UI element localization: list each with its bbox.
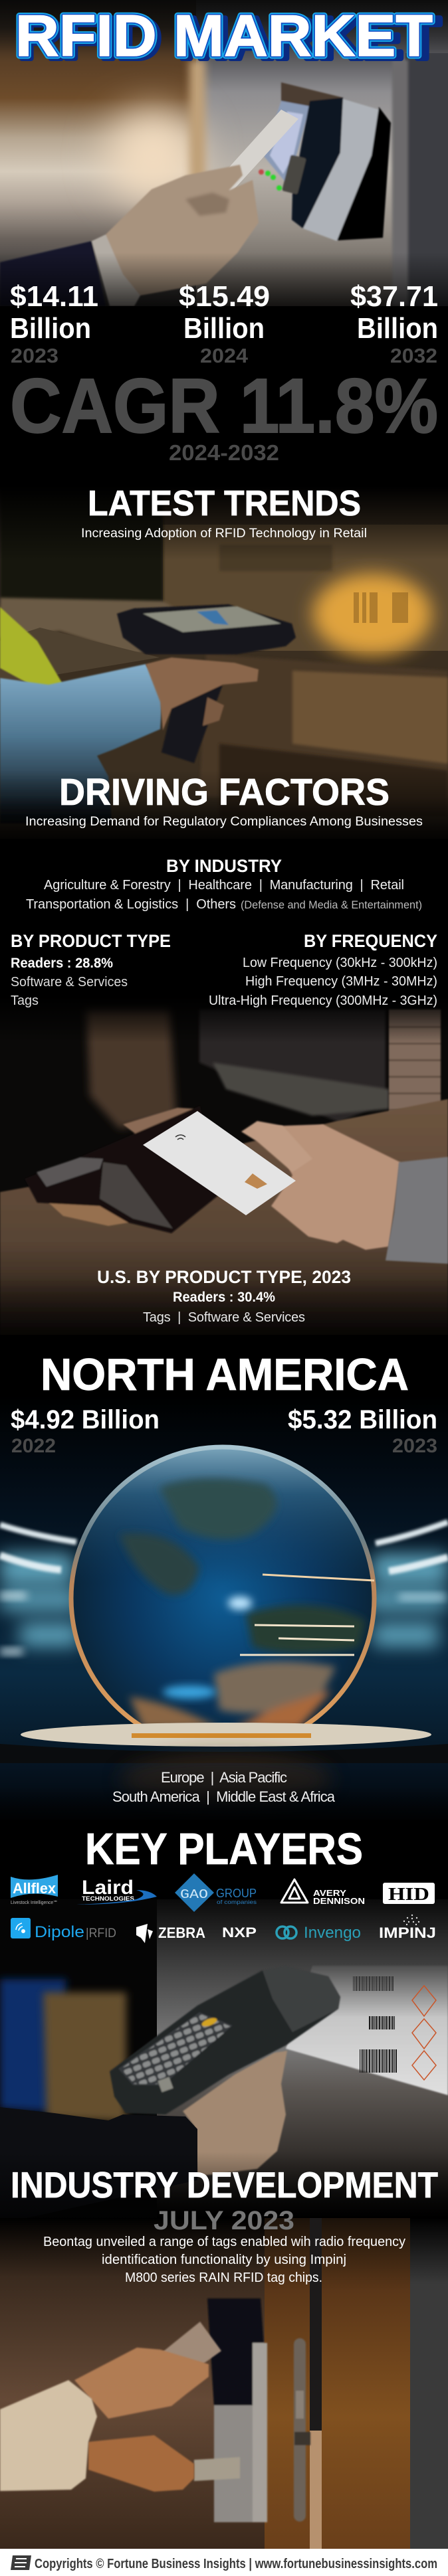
icon: contactless chip card — [143, 1111, 296, 1215]
illustration: cup stack — [389, 1009, 441, 1128]
illustration: hand on door handle — [88, 2435, 194, 2492]
block: by product type — [11, 931, 171, 1008]
logo: Laird Technologies — [76, 1877, 157, 1905]
text: development date: JULY 2023 — [154, 2206, 294, 2235]
panel: card payment photo — [0, 996, 448, 1336]
illustration: hand holding key card — [74, 2348, 209, 2419]
text: development description: M800 series RAIN RFID tag chips. — [125, 2271, 322, 2285]
block: by frequency: Ultra-High Frequency (300MHz - 3GHz) — [209, 993, 437, 1008]
text: other regions: South America | Middle East & Africa — [112, 1788, 336, 1805]
logo: Allflex — [11, 1875, 58, 1905]
stat: 2023 market size: 2023 — [11, 344, 58, 367]
stat: North America 2023 — [288, 1405, 437, 1457]
stat: 2032 market size: $37.71 — [350, 280, 438, 313]
illustration: hand behind card — [269, 1124, 400, 1250]
heading: driving factors: DRIVING FACTORS — [59, 771, 390, 814]
illustration: globe pedestal — [0, 1723, 448, 1766]
block: by industry: Agriculture & Forestry | Healthcare | Manufacturing | Retail — [44, 878, 404, 893]
text: other regions: Europe | Asia Pacific — [161, 1769, 287, 1786]
text: development description: identification functionality by using Impinj — [102, 2253, 346, 2267]
logo: Impinj: IMPINJ — [379, 1925, 436, 1941]
icon: white access card — [229, 110, 298, 191]
logo: Dipole RFID — [11, 1918, 116, 1941]
logo: Avery Dennison: AVERY — [313, 1888, 346, 1898]
icon: wall reader — [259, 82, 391, 241]
illustration: thumb on card — [241, 1121, 312, 1172]
stat: 2032 market size: 2032 — [390, 344, 437, 367]
heading: key players: KEY PLAYERS — [85, 1824, 363, 1874]
stat: 2024 market size: 2024 — [200, 344, 249, 367]
illustration: handheld RFID scanner — [117, 604, 296, 763]
illustration: shipping label with barcodes — [286, 1966, 448, 2095]
illustration: black sleeve — [0, 2107, 197, 2189]
stat: North America 2023: $5.32 Billion — [288, 1405, 437, 1434]
block: by frequency — [209, 931, 437, 1008]
logo: Dipole RFID: |RFID — [86, 1927, 116, 1940]
text: other regions — [112, 1769, 336, 1805]
stat: 2024 market size — [179, 280, 270, 367]
illustration: hand holding the scanner — [183, 2051, 287, 2176]
logo: Avery Dennison — [281, 1879, 365, 1906]
text: development description — [43, 2235, 405, 2285]
block: by industry: Transportation & Logistics | Others — [26, 897, 236, 912]
logo: Zebra: ZEBRA — [158, 1925, 205, 1941]
title: RFID MARKET — [15, 3, 433, 68]
stat: 2023 market size: $14.11 — [10, 280, 98, 313]
text: U.S. readers share: Readers : 30.4% — [173, 1290, 275, 1305]
logo: GAO Group: GAO — [180, 1887, 208, 1902]
stat: North America 2022 — [11, 1405, 160, 1457]
stat: CAGR: 2024-2032 — [169, 440, 279, 465]
stat: 2032 market size — [350, 280, 438, 367]
illustration: globe — [69, 1445, 376, 1752]
illustration: payment terminal — [25, 1106, 220, 1233]
logo: Allflex: Livestock Intelligence℠ — [11, 1900, 58, 1905]
heading: North America: NORTH AMERICA — [41, 1349, 409, 1400]
block: by frequency: High Frequency (3MHz - 30MHz) — [245, 974, 437, 989]
illustration: mobile computer scanner — [110, 1966, 340, 2114]
block: by product type: Software & Services — [11, 975, 128, 989]
stat: North America 2022: 2022 — [11, 1435, 56, 1457]
logo: Allflex: Allflex — [13, 1880, 56, 1897]
logo: GAO Group: GROUP — [216, 1887, 257, 1900]
title: RFID MARKET — [15, 3, 433, 68]
block: by product type: Readers : 28.8% — [11, 956, 113, 971]
block: by frequency: BY FREQUENCY — [304, 931, 437, 951]
title: RFID MARKET — [15, 3, 433, 68]
panel: hotel door lock photo — [0, 2218, 448, 2549]
panel: warehouse scanner photo — [0, 487, 448, 839]
logo: GAO Group: of companies — [217, 1899, 257, 1905]
illustration: cream sleeve — [0, 2380, 97, 2491]
footer bar — [0, 2549, 448, 2576]
illustration: hand and suit sleeve — [0, 165, 259, 306]
stat: 2024 market size: Billion — [183, 312, 265, 345]
stat: 2032 market size: Billion — [357, 312, 438, 345]
logo: Laird Technologies: Laird — [82, 1877, 134, 1899]
stat: 2024 market size: $15.49 — [179, 280, 270, 313]
illustration: arm and blue sleeve — [0, 664, 163, 823]
logo: Dipole RFID: Dipole — [35, 1923, 84, 1941]
block: by frequency: Low Frequency (30kHz - 300kHz) — [243, 956, 437, 970]
logos: key player row two — [11, 1915, 436, 1943]
title: RFID MARKET — [18, 5, 441, 71]
block: by industry: BY INDUSTRY — [166, 856, 282, 876]
logo: Invengo — [277, 1924, 361, 1942]
illustration: sweater cuff — [386, 1157, 448, 1264]
logo: Impinj — [379, 1915, 436, 1941]
illustration: door lock and reader — [194, 2298, 310, 2522]
illustration: glowing background bands — [0, 1522, 448, 1655]
stat: North America 2022: $4.92 Billion — [11, 1405, 160, 1434]
stat: 2023 market size — [10, 280, 98, 367]
logo: HID: HID — [388, 1884, 429, 1904]
logo: Invengo: Invengo — [304, 1924, 361, 1942]
panel: hero photo of a hand tapping a card on an access reader — [0, 0, 448, 306]
logo: GAO Group — [175, 1873, 257, 1912]
illustration: key card — [162, 2322, 221, 2364]
text: development description: Beontag unveiled a range of tags enabled wih radio frequency — [43, 2235, 405, 2249]
stat: 2023 market size: Billion — [10, 312, 91, 345]
logo: Zebra — [136, 1924, 205, 1943]
heading: latest trends: LATEST TRENDS — [88, 483, 361, 523]
panel: handheld barcode scanner photo — [0, 1899, 448, 2224]
icon: Fortune Business Insights logo — [11, 2555, 31, 2570]
block: by industry: (Defense and Media & Entertainment) — [241, 899, 422, 911]
block: by product type: BY PRODUCT TYPE — [11, 931, 171, 951]
text: U.S. other product types: Tags | Software & Services — [143, 1310, 305, 1325]
logos: key player row one — [11, 1873, 435, 1912]
heading: U.S. by product type: U.S. BY PRODUCT TYPE, 2023 — [97, 1267, 351, 1287]
text: driving factor description: Increasing Demand for Regulatory Compliances Among Businesses — [25, 815, 423, 829]
text: latest trend description: Increasing Adoption of RFID Technology in Retail — [81, 527, 367, 541]
logo: Avery Dennison: DENNISON — [313, 1896, 365, 1906]
logo: HID — [383, 1883, 435, 1904]
panel: globe photo — [0, 1395, 448, 1820]
logo: NXP: NXP — [222, 1925, 257, 1940]
block: by product type: Tags — [11, 993, 39, 1008]
stat: North America 2023: 2023 — [392, 1435, 437, 1457]
logo: Laird Technologies: TECHNOLOGIES — [82, 1895, 134, 1903]
block: by industry — [26, 856, 422, 912]
